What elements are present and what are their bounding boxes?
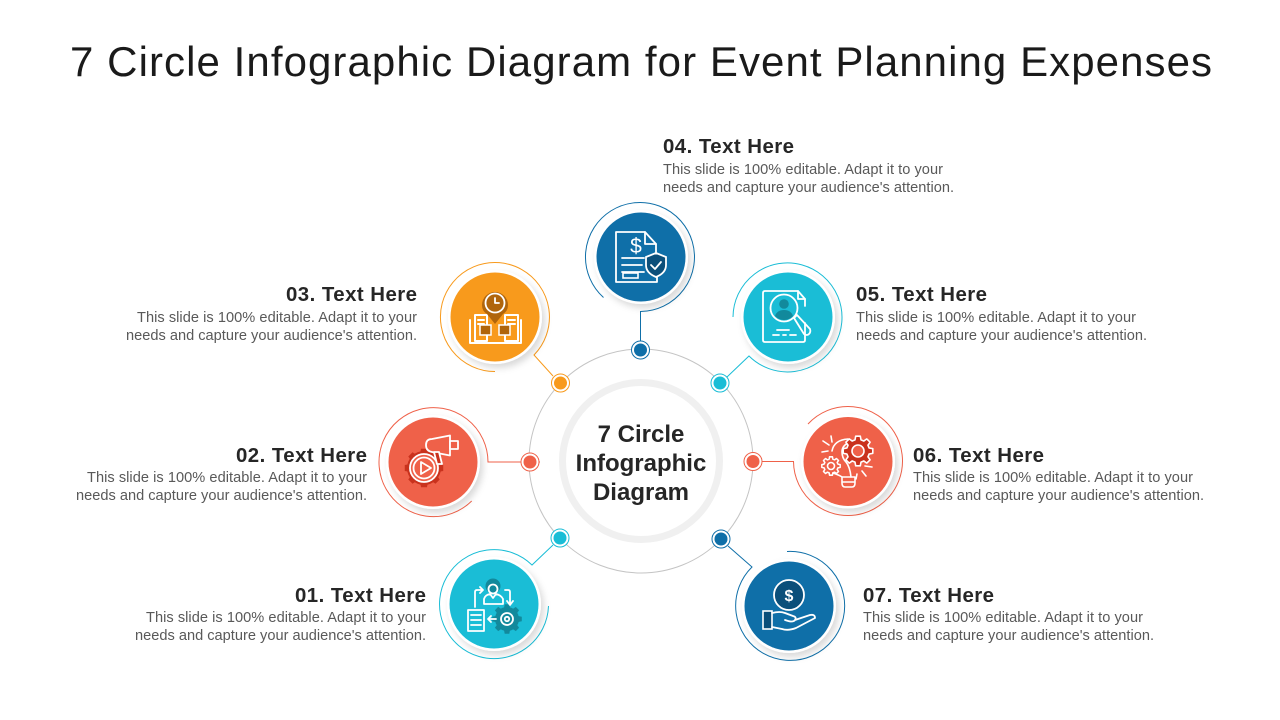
node 03 xyxy=(552,374,570,392)
disc 04 xyxy=(594,210,688,304)
node 01 xyxy=(551,529,569,547)
connector 07 xyxy=(728,546,845,660)
text 07: 07. Text Here xyxy=(863,585,994,607)
icon: team process and target xyxy=(468,578,522,634)
text 02: needs and capture your audience's attention. xyxy=(76,488,367,504)
text 04: This slide is 100% editable. Adapt it to your xyxy=(663,162,943,178)
text 04: needs and capture your audience's attention. xyxy=(663,180,954,196)
text 05: needs and capture your audience's attention. xyxy=(856,328,1147,344)
text 05: This slide is 100% editable. Adapt it to your xyxy=(856,310,1136,326)
text 02: 02. Text Here xyxy=(236,445,367,467)
text 06: This slide is 100% editable. Adapt it to your xyxy=(913,470,1193,486)
large connecting circle xyxy=(529,349,753,573)
text 05 xyxy=(856,284,1147,344)
center hub xyxy=(562,382,720,540)
node 04 xyxy=(632,341,650,359)
icon: megaphone and gear xyxy=(405,436,458,487)
node 02 xyxy=(521,453,539,471)
connector 06 xyxy=(762,407,902,516)
icon: event schedule xyxy=(470,292,521,343)
icon: candidate search document xyxy=(763,291,810,342)
text 04 xyxy=(663,136,954,196)
text 02: This slide is 100% editable. Adapt it to your xyxy=(87,470,367,486)
text 01: needs and capture your audience's attention. xyxy=(135,628,426,644)
disc 01 xyxy=(447,557,541,651)
node 05 xyxy=(711,374,729,392)
node 06 xyxy=(744,452,762,470)
text 01: This slide is 100% editable. Adapt it to your xyxy=(146,610,426,626)
text 03: needs and capture your audience's attention. xyxy=(126,328,417,344)
item 04 xyxy=(585,136,954,359)
icon: light bulb with gears xyxy=(822,436,873,487)
text 06: needs and capture your audience's attention. xyxy=(913,488,1204,504)
connector 05 xyxy=(727,263,842,377)
connector 03 xyxy=(440,263,553,376)
text 06: 06. Text Here xyxy=(913,445,1044,467)
text 03: 03. Text Here xyxy=(286,284,417,306)
center hub: Infographic xyxy=(576,450,706,477)
text 05: 05. Text Here xyxy=(856,284,987,306)
text 01 xyxy=(135,585,426,644)
disc 03 xyxy=(448,270,542,364)
connector 01 xyxy=(440,545,553,659)
text 07: needs and capture your audience's attention. xyxy=(863,628,1154,644)
icon: invoice with shield: $ xyxy=(630,235,642,258)
icon: hand holding coin: $ xyxy=(785,588,794,605)
text 03 xyxy=(126,284,417,344)
disc 06 xyxy=(801,414,895,508)
text 01: 01. Text Here xyxy=(295,585,426,607)
text 03: This slide is 100% editable. Adapt it to your xyxy=(137,310,417,326)
connector 02 xyxy=(379,408,540,517)
item 06 xyxy=(744,407,1204,516)
title: 7 Circle Infographic Diagram for Event Planning Expenses xyxy=(70,38,1212,85)
connector 04 xyxy=(585,203,694,342)
text 06 xyxy=(913,445,1204,504)
text 02 xyxy=(76,445,367,504)
item 02 xyxy=(76,408,540,517)
disc 05 xyxy=(741,270,835,364)
item 07 xyxy=(712,530,1154,660)
center hub: Diagram xyxy=(593,479,689,506)
icon: hand holding coin xyxy=(763,580,815,630)
icon: invoice with shield xyxy=(616,232,666,282)
disc 07 xyxy=(742,559,836,653)
text 07: This slide is 100% editable. Adapt it to your xyxy=(863,610,1143,626)
text 07 xyxy=(863,585,1154,644)
text 04: 04. Text Here xyxy=(663,136,794,158)
item 05 xyxy=(711,263,1147,392)
item 03 xyxy=(126,263,570,392)
node 07 xyxy=(712,530,730,548)
center label: 7 Circle xyxy=(598,421,684,448)
item 01 xyxy=(135,529,569,659)
disc 02 xyxy=(386,415,480,509)
